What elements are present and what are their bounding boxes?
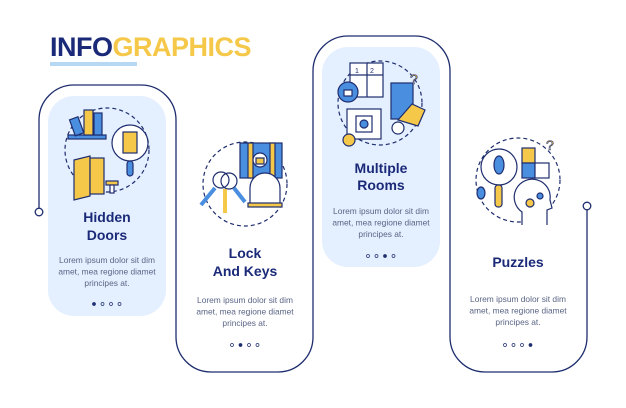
heading: puzzles: Puzzles <box>492 254 544 270</box>
text: multiple rooms <box>332 206 430 239</box>
panel: lock and keys <box>196 142 294 346</box>
icon: multiple rooms: 2 <box>370 68 374 75</box>
dots <box>230 344 259 346</box>
text: multiple rooms: principes at. <box>358 229 404 239</box>
text: hidden doors: Lorem ipsum dolor sit dim <box>59 255 155 265</box>
text: puzzles: principes at. <box>495 317 541 327</box>
panel: hidden doors <box>58 108 156 306</box>
icon: puzzles <box>476 137 560 225</box>
panel: multiple rooms <box>332 61 430 258</box>
text: hidden doors: principes at. <box>84 278 130 288</box>
dots <box>366 254 395 258</box>
heading: lock and keys: Lock <box>229 245 262 261</box>
text: lock and keys: amet, mea regione diamet <box>196 306 294 316</box>
panel backgrounds <box>48 47 440 316</box>
text: hidden doors: amet, mea regione diamet <box>58 266 156 276</box>
icon: lock and keys <box>201 142 287 226</box>
title: INFOGRAPHICS <box>50 32 251 62</box>
icon: multiple rooms: 1 <box>355 68 359 75</box>
dots <box>92 302 121 306</box>
panel: multiple rooms: Rooms <box>357 177 405 193</box>
icon: multiple rooms <box>338 61 425 146</box>
text: puzzles: amet, mea regione diamet <box>469 306 567 316</box>
panel: hidden doors: Doors <box>87 227 127 243</box>
panel: lock and keys: And Keys <box>213 263 277 279</box>
dots <box>504 344 532 346</box>
text: lock and keys: principes at. <box>222 318 268 328</box>
text: lock and keys: Lorem ipsum dolor sit dim <box>197 295 293 305</box>
text: multiple rooms: Lorem ipsum dolor sit dim <box>333 206 429 216</box>
icon: hidden doors <box>65 108 149 200</box>
heading: multiple rooms: Multiple <box>355 160 408 176</box>
heading: hidden doors: Hidden <box>83 209 131 225</box>
text: lock and keys <box>196 295 294 328</box>
panel: puzzles <box>469 137 567 346</box>
icon: puzzles: ? <box>546 137 554 153</box>
text: multiple rooms: amet, mea regione diamet <box>332 218 430 228</box>
connecting outline <box>35 36 591 372</box>
icon: multiple rooms: ? <box>410 71 418 87</box>
text: hidden doors <box>58 255 156 288</box>
text: puzzles <box>469 294 567 327</box>
text: puzzles: Lorem ipsum dolor sit dim <box>470 294 566 304</box>
